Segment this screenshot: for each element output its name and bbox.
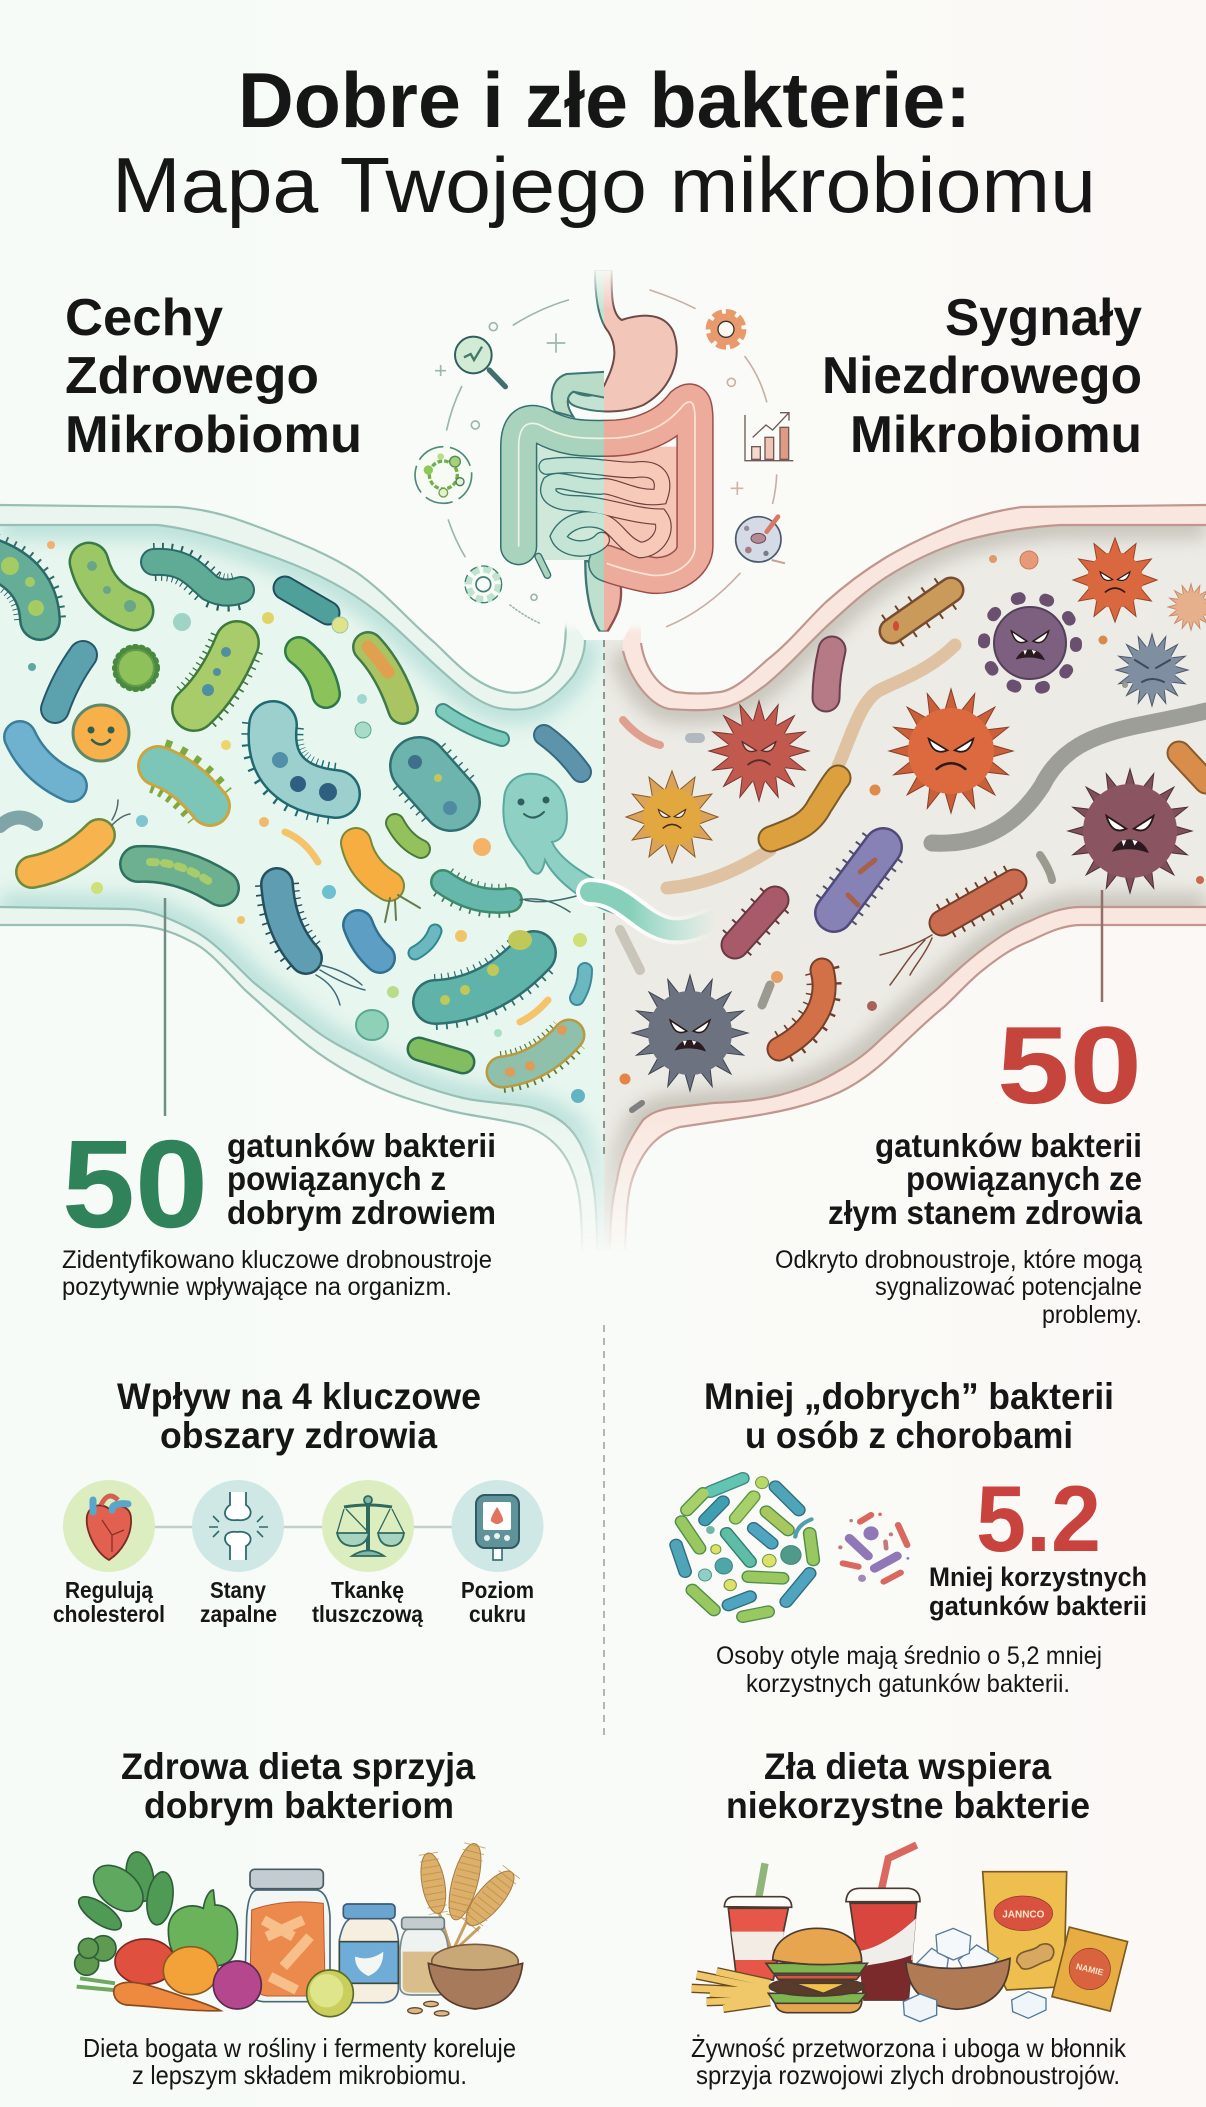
text: healthy diet description <box>83 2033 516 2090</box>
bacterium 22 ghost <box>503 774 620 915</box>
bacterium 25 <box>358 925 380 958</box>
wheat <box>417 1840 522 1953</box>
bacterium 24 <box>277 884 365 1005</box>
heading: fewer good bacteria: u osób z chorobami <box>745 1415 1073 1456</box>
bacterium 9 <box>368 647 403 709</box>
rod c <box>771 778 838 839</box>
sugar bowl <box>906 1928 1010 2009</box>
heading: healthy microbiome features <box>65 289 362 464</box>
heading: healthy diet: dobrym bakteriom <box>144 1785 454 1826</box>
text: unhealthy description: sygnalizować potencjalne <box>875 1273 1142 1301</box>
rod e <box>735 900 775 945</box>
cup with green straw <box>724 1863 792 1980</box>
sugar cubes <box>903 1992 1046 2022</box>
text: healthy description: Zidentyfikowano kluczowe drobnoustroje <box>62 1246 492 1274</box>
bacterium 30 <box>419 1049 463 1062</box>
cup with red straw <box>846 1845 920 2000</box>
text: bad diet description: sprzyja rozwojowi zlych drobnoustrojów. <box>696 2060 1120 2090</box>
callout line: healthy <box>164 898 166 1116</box>
bacterium 21 <box>395 823 421 849</box>
heading: healthy microbiome features: Cechy <box>65 289 223 347</box>
heading: healthy diet: Zdrowa dieta sprzyja <box>121 1746 475 1787</box>
labels: health areas: Poziom <box>461 1577 534 1603</box>
icon: magnifier with check <box>455 337 505 387</box>
text: unhealthy description <box>775 1246 1142 1329</box>
icon: gear orange <box>711 314 741 345</box>
bacterium 1 <box>0 557 44 620</box>
snack bag small: NAMIE <box>1075 1961 1105 1978</box>
bacterium 8 <box>299 651 326 694</box>
small jar <box>400 1917 448 1995</box>
french fries <box>692 1972 770 2008</box>
bacterium 4 <box>285 588 328 613</box>
stat: 50 bad species: złym stanem zdrowia <box>828 1194 1143 1231</box>
bacterium 29 <box>356 1010 388 1040</box>
text: fewer beneficial species <box>929 1562 1147 1621</box>
streak: tan sludge <box>667 645 955 888</box>
labels: health areas: Regulują <box>65 1577 153 1603</box>
heading: healthy diet <box>121 1746 475 1826</box>
text: bad diet description <box>691 2033 1127 2090</box>
orange tomato <box>163 1947 218 1995</box>
carrot <box>114 1982 221 2011</box>
dots healthy <box>28 541 587 1103</box>
stat: 50 good species: powiązanych z <box>227 1160 446 1197</box>
heading: unhealthy microbiome signals <box>822 289 1142 464</box>
gut shape right pink <box>604 270 714 632</box>
icon: diverse microbiome circle <box>676 1477 813 1617</box>
bacterium 17 <box>32 800 130 872</box>
icon: rising chart <box>745 413 793 461</box>
rod g <box>779 970 824 1049</box>
heading: unhealthy microbiome signals: Sygnały <box>945 289 1142 347</box>
icon: balance scale <box>322 1480 414 1572</box>
text: unhealthy description: problemy. <box>1042 1301 1142 1329</box>
bacterium 18 <box>138 862 221 888</box>
virus 2 purple <box>984 597 1076 689</box>
virus 9 grey <box>632 975 748 1091</box>
stream: teal crossing halo <box>590 892 712 930</box>
stat: 50 bad species: powiązanych ze <box>906 1160 1142 1197</box>
labels: health areas <box>53 1577 534 1627</box>
labels: health areas: tluszczową <box>312 1601 423 1627</box>
stat: 5.2: 5.2 <box>976 1466 1101 1571</box>
illustration: junk foods <box>692 1845 1128 2022</box>
stat: 50 good species: dobrym zdrowiem <box>227 1194 496 1231</box>
text: healthy description <box>62 1246 492 1301</box>
stat: 50 good species: 50 <box>62 1115 208 1254</box>
labels: health areas: Stany <box>210 1577 266 1603</box>
heading: bad diet: Zła dieta wspiera <box>764 1746 1051 1787</box>
burger <box>766 1928 867 2013</box>
bacterium 14 <box>158 766 210 806</box>
bacterium 19 edge <box>0 817 36 826</box>
labels: health areas: zapalne <box>200 1601 277 1627</box>
virus 5 big orange <box>889 689 1013 813</box>
text: bad diet description: Żywność przetworzona i uboga w błonnik <box>691 2033 1127 2063</box>
leafy greens <box>74 1850 176 1936</box>
lime <box>307 1970 353 2017</box>
heading: health areas <box>117 1376 481 1456</box>
icon: joint <box>192 1480 284 1572</box>
snack bag large: JANNCO <box>1002 1909 1045 1920</box>
icon: gear green <box>465 566 502 603</box>
bacterium 12 smiley <box>73 705 129 761</box>
stat: 50 good species: gatunków bakterii <box>227 1127 496 1164</box>
text: obesity note: korzystnych gatunków bakterii. <box>746 1670 1070 1698</box>
onion <box>213 1961 261 2009</box>
bacterium 26 <box>415 931 435 953</box>
virus 1 <box>1073 538 1157 622</box>
title: Mapa Twojego mikrobiomu <box>112 141 1096 229</box>
rod d <box>834 847 883 913</box>
icon: glucose meter <box>452 1480 544 1572</box>
bacterium 7 <box>194 643 237 709</box>
labels: health areas: cholesterol <box>53 1601 165 1627</box>
virus 7 yellow <box>626 771 718 863</box>
bacterium 11 <box>544 735 581 772</box>
dashed orbit arcs <box>447 290 777 627</box>
title: Dobre i złe bakterie: <box>238 56 971 144</box>
illustration: healthy foods <box>74 1840 523 2017</box>
bacterium 6 round <box>115 647 157 689</box>
heading: bad diet: niekorzystne bakterie <box>726 1785 1090 1826</box>
text: healthy diet description: Dieta bogata w rośliny i fermenty koreluje <box>83 2033 516 2063</box>
bacterium 10 <box>443 711 502 739</box>
icon: heart <box>63 1480 155 1572</box>
icon: damaged cell <box>736 517 785 563</box>
rod f <box>880 882 1014 985</box>
text: healthy diet description: z lepszym składem mikrobiomu. <box>132 2060 467 2090</box>
stat: 50 bad species <box>828 1004 1143 1231</box>
tomato <box>115 1939 175 1984</box>
kimchi jar <box>245 1869 330 2002</box>
small plus and ring marks <box>435 323 743 600</box>
virus 6 red <box>709 701 809 801</box>
text: unhealthy description: Odkryto drobnoustroje, które mogą <box>775 1246 1142 1274</box>
virus 8 brown <box>1068 769 1192 893</box>
virus 3 blue <box>1116 634 1188 706</box>
illustration: gut anatomy <box>415 270 793 632</box>
bacteria: healthy group <box>0 541 620 1103</box>
stream: teal crossing fill <box>590 892 712 930</box>
seeds <box>408 2001 449 2016</box>
dots unhealthy <box>620 551 1204 1110</box>
grain bowl <box>428 1944 523 2009</box>
snack bag small <box>1052 1927 1128 2011</box>
heading: health areas: Wpływ na 4 kluczowe <box>117 1376 481 1417</box>
broccoli <box>75 1936 116 1990</box>
labels: health areas: cukru <box>469 1601 526 1627</box>
text: fewer beneficial species: gatunków bakterii <box>929 1591 1147 1621</box>
bacterium 3 <box>154 562 241 593</box>
stat: 50 bad species: 50 <box>997 1004 1142 1127</box>
heading: healthy microbiome features: Zdrowego <box>65 347 319 405</box>
heading: healthy microbiome features: Mikrobiomu <box>65 406 362 464</box>
icon: depleted microbiome circle <box>838 1513 909 1582</box>
heading: fewer good bacteria: Mniej „dobrych” bakterii <box>704 1376 1114 1417</box>
center dashed divider <box>603 640 605 1735</box>
virus 4 tan <box>1168 584 1206 630</box>
connector line for health icons <box>109 1526 497 1528</box>
heading: fewer good bacteria <box>704 1376 1114 1456</box>
bacterium 2 <box>87 561 136 612</box>
bacterium 13 <box>20 737 71 786</box>
rod b <box>826 650 832 698</box>
bacterium 23 <box>443 882 580 912</box>
bacteria: unhealthy group <box>590 538 1206 1110</box>
panel: unhealthy gut channel <box>604 505 1206 1250</box>
bacterium 31 <box>502 1025 569 1077</box>
snack bag large <box>983 1872 1067 1990</box>
icon: petri dish <box>415 447 472 503</box>
bacterium 15 kidney <box>272 725 337 801</box>
labels: health areas: Tkankę <box>331 1577 404 1603</box>
bacterium 16 <box>408 755 457 815</box>
text: healthy description: pozytywnie wpływające na organizm. <box>62 1273 452 1301</box>
heading: unhealthy microbiome signals: Niezdrowego <box>822 347 1142 405</box>
bacterium 5 <box>55 655 83 709</box>
heading: unhealthy microbiome signals: Mikrobiomu <box>850 406 1142 464</box>
yogurt jar <box>339 1904 398 2003</box>
bacterium 27 <box>435 930 534 1005</box>
heading: health areas: obszary zdrowia <box>160 1415 437 1456</box>
stat: 50 bad species: gatunków bakterii <box>875 1127 1142 1164</box>
panel: healthy gut channel <box>0 505 604 1250</box>
stat: 50 good species <box>62 1115 496 1254</box>
bacterium 28 <box>577 970 585 998</box>
gut shape left green <box>500 270 604 632</box>
streak: grey sludge <box>932 711 1206 843</box>
text: fewer beneficial species: Mniej korzystnych <box>929 1562 1147 1592</box>
rod a <box>892 590 951 631</box>
callout line: unhealthy <box>1101 890 1103 1002</box>
heading: bad diet <box>726 1746 1090 1826</box>
text: obesity note: Osoby otyle mają średnio o 5,2 mniej <box>716 1642 1102 1670</box>
title <box>112 56 1096 229</box>
rod h <box>1179 753 1206 782</box>
bell pepper <box>168 1890 237 1967</box>
text: obesity note <box>716 1642 1102 1698</box>
bacterium 20 <box>356 843 420 922</box>
gut organs, faded at the top <box>519 270 695 632</box>
